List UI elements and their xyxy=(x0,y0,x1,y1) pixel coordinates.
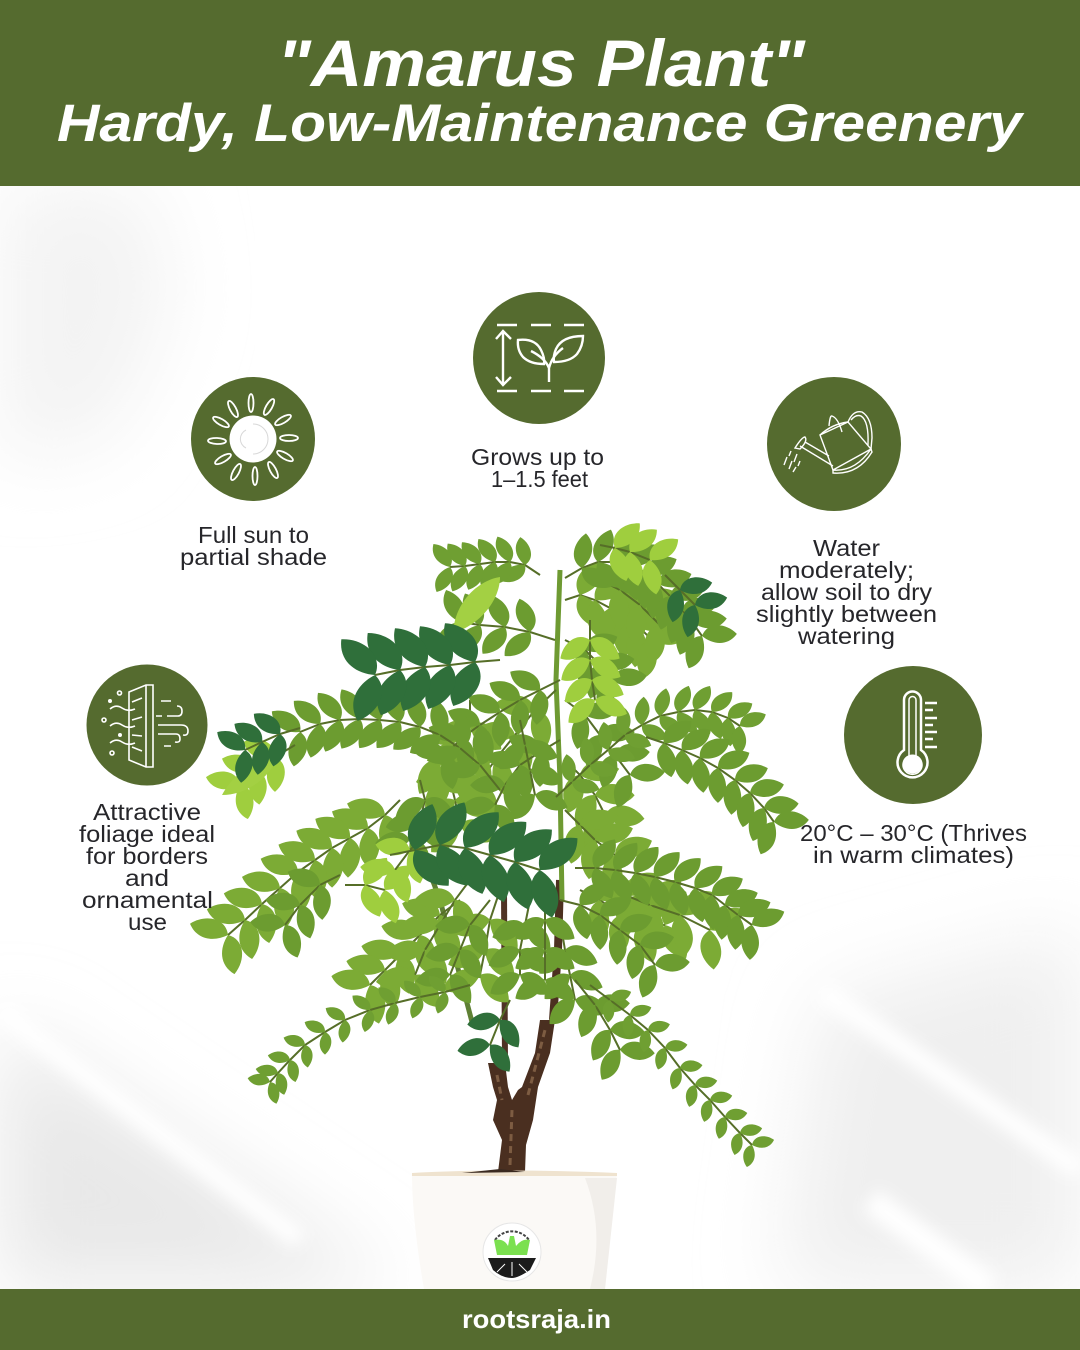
lime fronds and leaves xyxy=(222,545,650,890)
lower fronds xyxy=(270,875,752,1145)
icon: air-filtering foliage xyxy=(86,664,208,786)
caption: water: slightly between xyxy=(756,601,937,627)
caption: height xyxy=(471,444,604,492)
caption: foliage: foliage ideal xyxy=(79,821,215,847)
caption: foliage: for borders xyxy=(86,843,208,869)
caption: light xyxy=(180,522,327,570)
caption: water: Water xyxy=(813,535,880,561)
header band xyxy=(0,0,1080,186)
title xyxy=(57,26,1025,153)
caption: foliage: Attractive xyxy=(93,799,201,825)
caption: water xyxy=(756,535,937,649)
caption: height: Grows up to xyxy=(471,444,604,470)
caption: foliage: and xyxy=(125,865,169,891)
caption: temperature xyxy=(800,820,1027,868)
title: Hardy, Low-Maintenance Greenery xyxy=(57,94,1025,153)
caption: foliage: ornamental xyxy=(82,887,213,913)
plant xyxy=(222,545,774,1289)
back foliage fronds xyxy=(228,580,710,985)
leaf fronds xyxy=(222,545,774,1145)
icon: plant height xyxy=(473,292,605,424)
caption: water: moderately; xyxy=(779,557,914,583)
footer website: rootsraja.in xyxy=(462,1304,611,1334)
caption: light: Full sun to xyxy=(198,522,309,548)
right fronds xyxy=(556,710,774,1050)
caption: height: 1–1.5 feet xyxy=(491,466,589,492)
pot xyxy=(412,1169,617,1289)
icon: sun xyxy=(191,377,315,501)
caption: foliage: use xyxy=(128,909,167,935)
caption: water: watering xyxy=(797,623,895,649)
main stems xyxy=(425,570,562,1063)
trunk xyxy=(488,1020,555,1172)
upper and centre fronds xyxy=(300,562,702,840)
logo sticker xyxy=(483,1223,541,1281)
icon: watering can xyxy=(767,377,901,511)
caption: temperature: 20°C – 30°C (Thrives xyxy=(800,820,1027,846)
title: "Amarus Plant" xyxy=(277,26,806,100)
footer band xyxy=(0,1289,1080,1350)
caption: water: allow soil to dry xyxy=(761,579,933,605)
caption: light: partial shade xyxy=(180,544,327,570)
caption: temperature: in warm climates) xyxy=(813,842,1014,868)
icon: thermometer xyxy=(844,666,982,804)
caption: foliage xyxy=(79,799,215,935)
dark glossy fronds xyxy=(245,575,695,1045)
